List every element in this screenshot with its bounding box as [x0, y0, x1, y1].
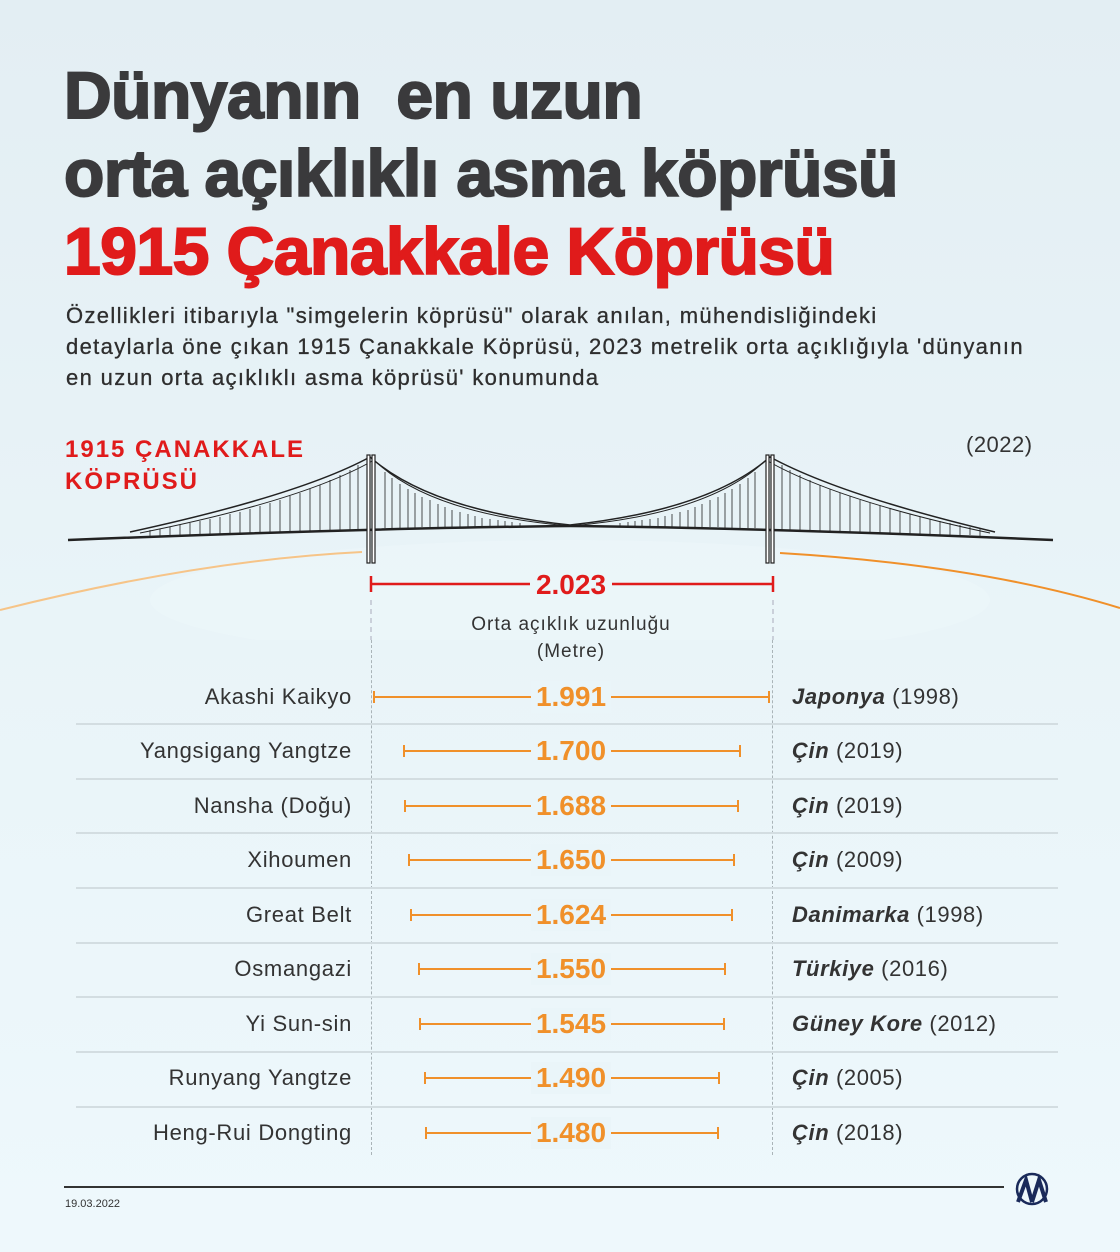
row: Yangsigang: 1.700	[536, 735, 606, 766]
row: Great Belt: Great Belt	[246, 902, 352, 927]
bridge label: 1915 ÇANAKKALE	[65, 436, 305, 463]
date: 19.03.2022	[65, 1198, 120, 1210]
row: Yangsigang: Yangsigang Yangtze	[140, 738, 352, 763]
dimension line	[371, 576, 773, 592]
row: Osmangazi: Osmangazi	[234, 956, 352, 981]
row: Runyang: Çin (2005)	[792, 1065, 903, 1090]
row: Osmangazi: 1.550	[536, 953, 606, 984]
row: Xihoumen: 1.650	[536, 844, 606, 875]
row: Runyang: Runyang Yangtze	[169, 1065, 352, 1090]
row: Xihoumen	[247, 844, 903, 875]
row: Osmangazi	[234, 953, 948, 984]
title: orta açıklıklı asma köprüsü	[64, 136, 898, 210]
row: Osmangazi: Türkiye (2016)	[792, 956, 948, 981]
row: Akashi Kaikyo: Japonya (1998)	[792, 684, 959, 709]
year label: (2022)	[966, 432, 1033, 457]
icon: AA logo	[1016, 1172, 1048, 1206]
row: Runyang	[169, 1062, 903, 1093]
row: Yangsigang	[140, 735, 903, 766]
lead text	[66, 303, 1024, 390]
title: Dünyanın en uzun	[64, 58, 642, 132]
footer line	[64, 1186, 1004, 1188]
row: Runyang: 1.490	[536, 1062, 606, 1093]
lead text: Özellikleri itibarıyla "simgelerin köprüsü" olarak anılan, mühendisliğindeki	[66, 303, 878, 328]
row: Yangsigang: Çin (2019)	[792, 738, 903, 763]
row: Xihoumen: Çin (2009)	[792, 847, 903, 872]
row: Yi Sun-sin: Yi Sun-sin	[246, 1011, 352, 1036]
row: Heng-Rui: 1.480	[536, 1117, 606, 1148]
row: Great Belt: 1.624	[536, 899, 606, 930]
dashed guides	[371, 640, 372, 1155]
row: Great Belt	[246, 899, 984, 930]
title: 1915 Çanakkale Köprüsü	[64, 214, 834, 288]
row: Akashi Kaikyo: Akashi Kaikyo	[205, 684, 352, 709]
row: Yi Sun-sin: 1.545	[536, 1008, 606, 1039]
bridge illustration	[0, 454, 1120, 640]
axis label	[471, 614, 671, 662]
row: Akashi Kaikyo: 1.991	[536, 681, 606, 712]
bridge illustration: 2.023	[536, 569, 606, 600]
bridge label: KÖPRÜSÜ	[65, 468, 199, 495]
row: Nansha: Çin (2019)	[792, 793, 903, 818]
row: Nansha: 1.688	[536, 790, 606, 821]
row: Akashi Kaikyo	[204, 681, 959, 712]
row: Heng-Rui	[153, 1117, 903, 1148]
row: Yi Sun-sin: Güney Kore (2012)	[792, 1011, 997, 1036]
row: Nansha	[194, 790, 903, 821]
lead text: detaylarla öne çıkan 1915 Çanakkale Köprüsü, 2023 metrelik orta açıklığıyla 'dünyanın	[66, 334, 1024, 359]
row: Great Belt: Danimarka (1998)	[792, 902, 984, 927]
bridge label	[65, 436, 305, 495]
title	[64, 58, 898, 288]
lead text: en uzun orta açıklıklı asma köprüsü' konumunda	[66, 365, 599, 390]
row: Heng-Rui: Çin (2018)	[792, 1120, 903, 1145]
row: Xihoumen: Xihoumen	[247, 847, 352, 872]
axis label: Orta açıklık uzunluğu	[471, 614, 671, 635]
row: Nansha: Nansha (Doğu)	[194, 793, 352, 818]
row: Heng-Rui: Heng-Rui Dongting	[153, 1120, 352, 1145]
axis label: (Metre)	[537, 641, 605, 662]
row: Yi Sun-sin	[246, 1008, 997, 1039]
